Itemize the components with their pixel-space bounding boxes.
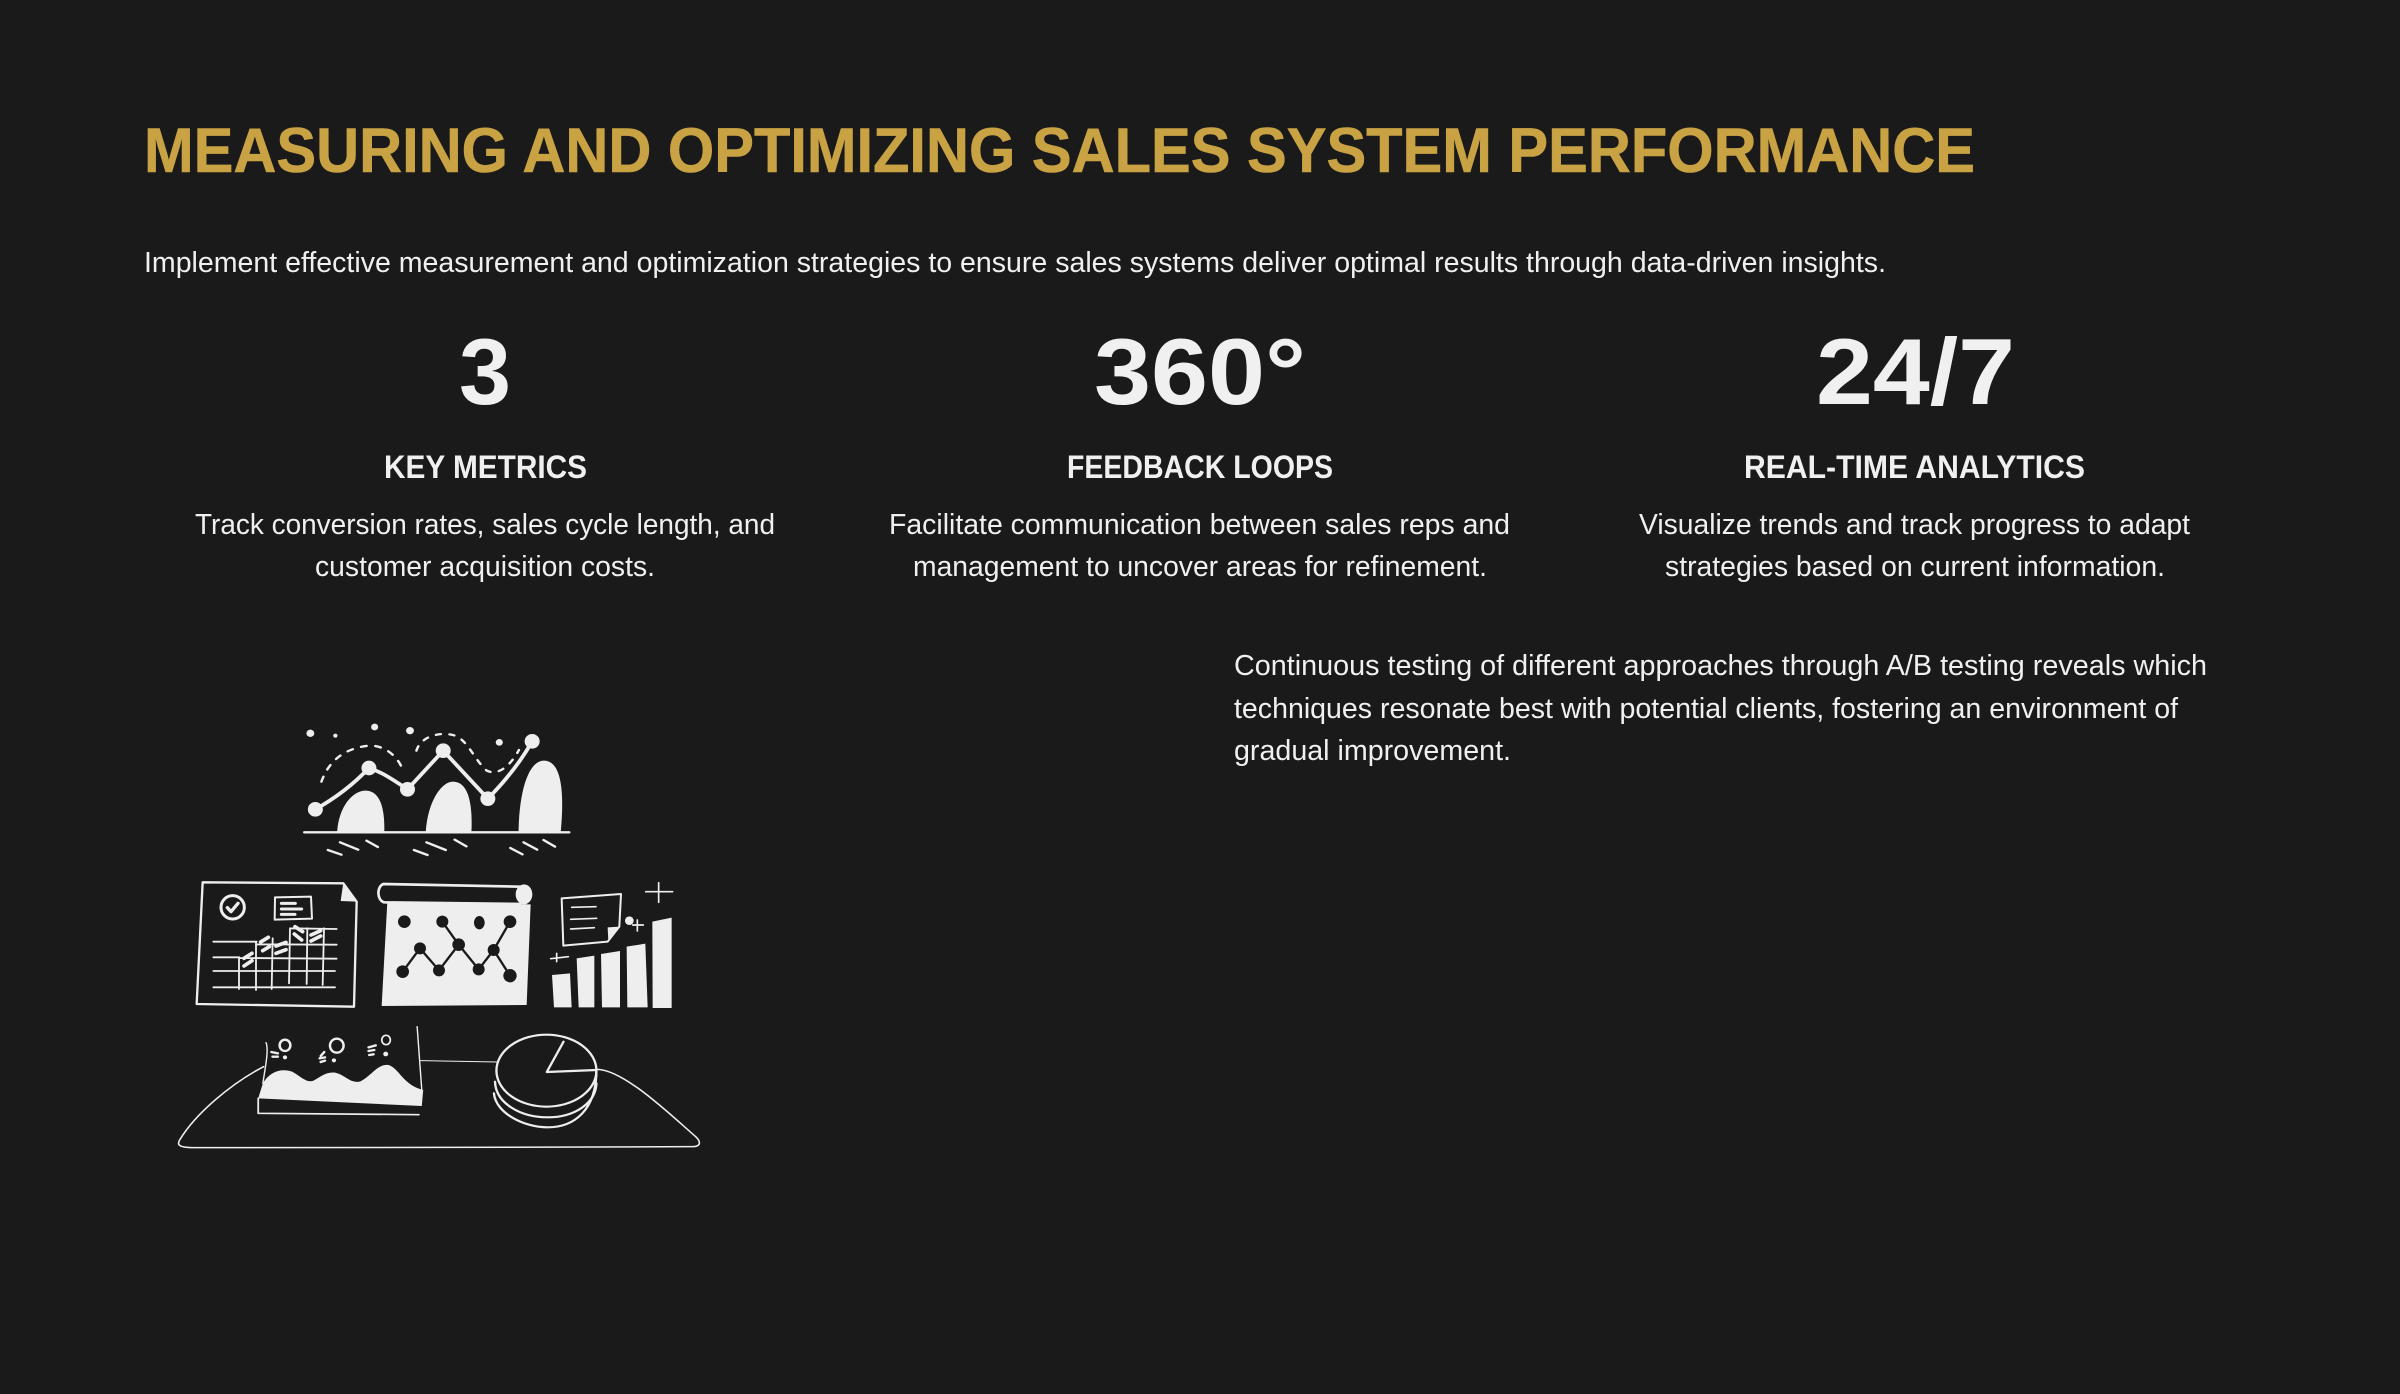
paragraph: continuous testing xyxy=(1234,650,2207,767)
paragraph: continuous testing: techniques resonate best with potential clients, fostering an environment of xyxy=(1234,693,2179,725)
stat heading: real-time analytics: REAL-TIME ANALYTICS xyxy=(1744,449,2085,485)
stat description: key metrics: Track conversion rates, sales cycle length, and xyxy=(195,509,775,541)
stat number: 3: 3 xyxy=(459,319,511,424)
stat description: real-time analytics xyxy=(1639,509,2190,583)
stat description: key metrics xyxy=(195,509,775,583)
stat description: feedback loops: management to uncover areas for refinement. xyxy=(913,551,1487,583)
stat description: key metrics: customer acquisition costs. xyxy=(315,551,655,583)
intro text: Implement effective measurement and optimization strategies to ensure sales systems deliver optimal results through data-driven insights. xyxy=(144,247,1886,279)
stat heading: key metrics: KEY METRICS xyxy=(384,449,587,485)
stat description: feedback loops: Facilitate communication between sales reps and xyxy=(889,509,1510,541)
stat heading: feedback loops: FEEDBACK LOOPS xyxy=(1067,449,1333,485)
paragraph: continuous testing: gradual improvement. xyxy=(1234,735,1511,767)
stat panel: real-time analytics xyxy=(1639,319,2190,583)
stat description: real-time analytics: strategies based on current information. xyxy=(1665,551,2165,583)
illustration: analytics sketches xyxy=(179,724,699,1148)
icon: tray with area chart and pie chart xyxy=(179,1027,699,1148)
title: MEASURING AND OPTIMIZING SALES SYSTEM PERFORMANCE xyxy=(144,116,1975,186)
stat number: 360 degrees: 360° xyxy=(1094,319,1306,424)
stat panel: feedback loops xyxy=(889,319,1510,583)
stat number: 24/7: 24/7 xyxy=(1816,319,2015,424)
stat panel: key metrics xyxy=(195,319,775,583)
stat description: feedback loops xyxy=(889,509,1510,583)
icon: rising bar chart with note xyxy=(551,883,673,1008)
icon: spreadsheet document xyxy=(197,882,357,1007)
paragraph: continuous testing: Continuous testing of different approaches through A/B testing reveals which xyxy=(1234,650,2207,682)
icon: line chart over humps xyxy=(304,724,569,855)
icon: presentation board with chart xyxy=(378,884,532,1006)
stat description: real-time analytics: Visualize trends and track progress to adapt xyxy=(1639,509,2190,541)
